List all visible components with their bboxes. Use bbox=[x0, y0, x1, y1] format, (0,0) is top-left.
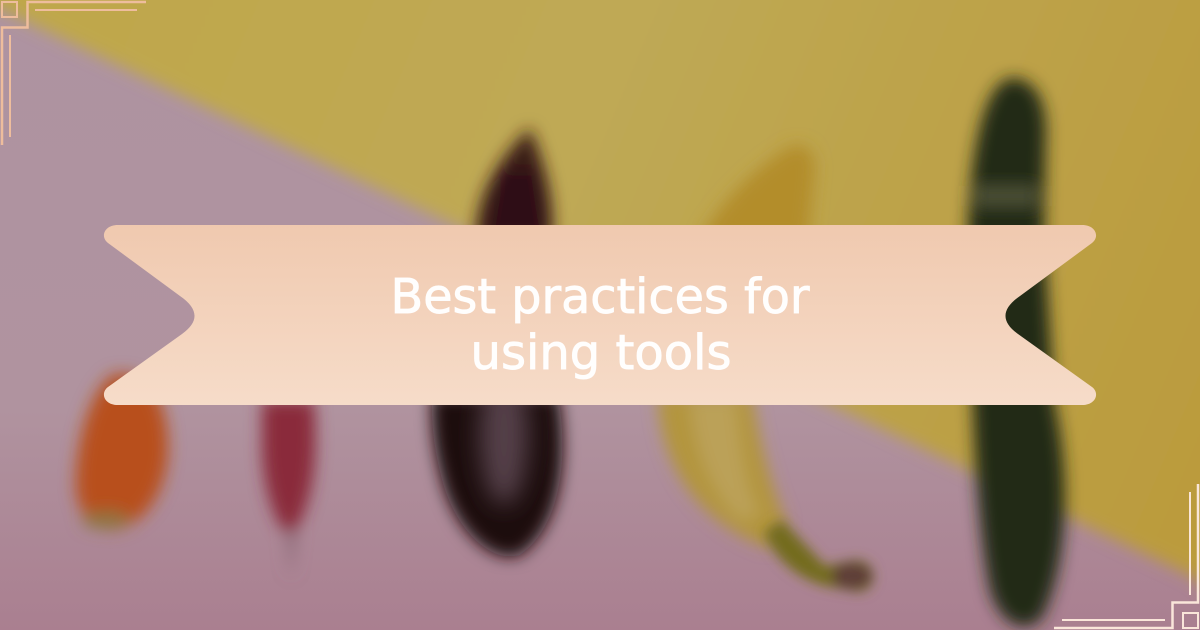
corner ornament: top left bbox=[2, 2, 146, 145]
corner square bbox=[2, 2, 17, 17]
ribbon banner bbox=[104, 225, 1096, 405]
title bbox=[390, 269, 810, 381]
corner ornament: bottom right bbox=[1054, 484, 1198, 628]
title: Best practices for bbox=[390, 269, 810, 325]
eggplant bottom bbox=[432, 395, 563, 557]
banana top bbox=[700, 145, 815, 240]
eggplant top bbox=[476, 128, 553, 240]
eggplant highlight bbox=[480, 365, 528, 505]
title: using tools bbox=[470, 325, 732, 381]
corner square bbox=[1183, 613, 1198, 628]
red radish bbox=[262, 400, 316, 578]
orange pepper bbox=[76, 374, 168, 530]
banana stem bbox=[764, 520, 873, 592]
cucumber bbox=[968, 78, 1065, 627]
banana bottom bbox=[658, 395, 786, 548]
